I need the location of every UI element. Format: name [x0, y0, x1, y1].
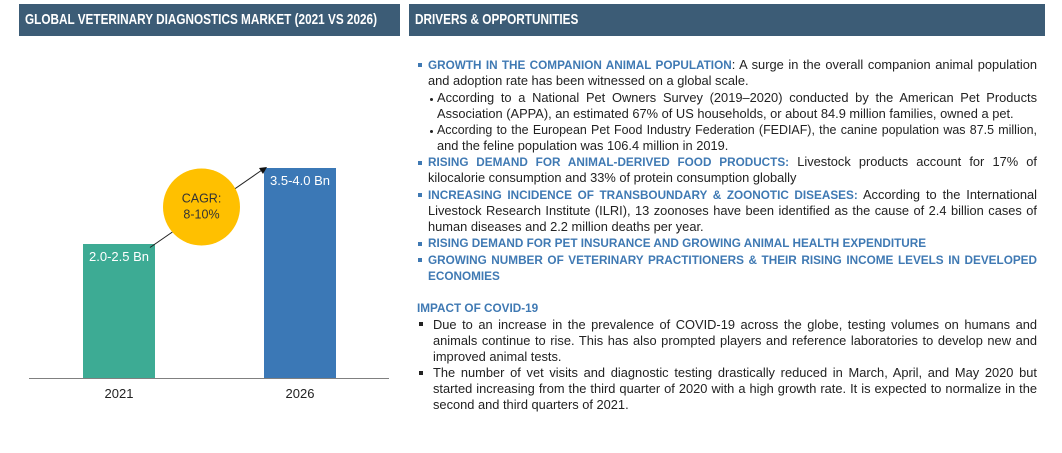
- text block: covid impact: The number of vet visits and diagnostic testing drastically reduced in March, April, and May 2020 but: [433, 365, 1037, 380]
- text block: drivers: RISING DEMAND FOR PET INSURANCE AND GROWING ANIMAL HEALTH EXPENDITURE: [428, 237, 926, 250]
- bar: 2021: [83, 244, 155, 378]
- text block: drivers: RISING DEMAND FOR ANIMAL-DERIVED FOOD PRODUCTS: Livestock products account for 17% of: [428, 154, 1037, 169]
- text block: drivers: Livestock Research Institute (ILRI), 13 zoonoses have been identified as the cause of 2.4 billion cases of: [428, 203, 1037, 218]
- bar chart: [29, 167, 389, 401]
- driver: animal-derived food: [418, 154, 1037, 185]
- text block: covid impact: Due to an increase in the prevalence of COVID-19 across the globe, testing volumes on humans and: [433, 317, 1037, 332]
- text block: covid impact: improved animal tests.: [433, 349, 562, 364]
- bar: 2026: [264, 168, 336, 378]
- callout: CAGR: 8-10%: [183, 208, 220, 222]
- text block: drivers: According to the European Pet Food Industry Federation (FEDIAF), the canine population was 87.5 million,: [437, 123, 1037, 137]
- text block: drivers: ECONOMIES: [428, 270, 500, 283]
- text block: drivers: GROWING NUMBER OF VETERINARY PRACTITIONERS & THEIR RISING INCOME LEVELS IN DEVELOPED: [428, 254, 1037, 267]
- text block: drivers: human diseases and 2.2 million deaths per year.: [428, 219, 704, 234]
- text block: drivers: INCREASING INCIDENCE OF TRANSBOUNDARY & ZOONOTIC DISEASES: According to the International: [428, 187, 1037, 202]
- heading: market chart: GLOBAL VETERINARY DIAGNOSTICS MARKET (2021 VS 2026): [25, 11, 377, 28]
- axis label: 2026: 2026: [286, 386, 314, 401]
- bar: 2021: 2.0-2.5 Bn: [89, 249, 149, 264]
- driver: companion animal population: [418, 57, 1037, 153]
- text block: covid impact: started increasing from the third quarter of 2020 with a high growth rate. It is expected to normalize in the: [433, 381, 1037, 396]
- text block: drivers: kilocalorie consumption and 33% of protein consumption globally: [428, 170, 796, 185]
- text block: drivers: and the feline population was 106.4 million in 2019.: [437, 138, 728, 153]
- bar: 2026: 3.5-4.0 Bn: [270, 173, 330, 188]
- text block: covid impact: animals continue to rise. This has also prompted players and reference laboratories to develop new and: [433, 333, 1037, 348]
- axis label: 2021: 2021: [105, 386, 133, 401]
- text block: drivers: and adoption rate has been witnessed on a global scale.: [428, 73, 749, 88]
- axis: [29, 378, 389, 380]
- text block: covid impact: [419, 317, 1037, 412]
- text block: covid impact: second and third quarters of 2021.: [433, 397, 629, 412]
- driver: veterinary practitioners: [418, 254, 1037, 283]
- arrow: growth: [150, 167, 267, 248]
- text block: drivers: Association (APPA), an estimated 67% of US households, or about 84.9 million families, owned a pet.: [437, 106, 1014, 121]
- callout: CAGR: [163, 168, 240, 246]
- driver: zoonotic diseases: [418, 187, 1037, 234]
- heading: impact of COVID-19: IMPACT OF COVID-19: [417, 302, 538, 315]
- heading: market chart: [19, 4, 400, 36]
- callout: CAGR: CAGR:: [182, 192, 221, 206]
- text block: drivers: According to a National Pet Owners Survey (2019–2020) conducted by the American Pet Products: [437, 90, 1037, 105]
- heading: drivers and opportunities: DRIVERS & OPPORTUNITIES: [415, 11, 578, 28]
- heading: drivers and opportunities: [409, 4, 1045, 36]
- text block: drivers: [418, 57, 1037, 283]
- text block: drivers: GROWTH IN THE COMPANION ANIMAL POPULATION: A surge in the overall companion animal population: [428, 57, 1037, 72]
